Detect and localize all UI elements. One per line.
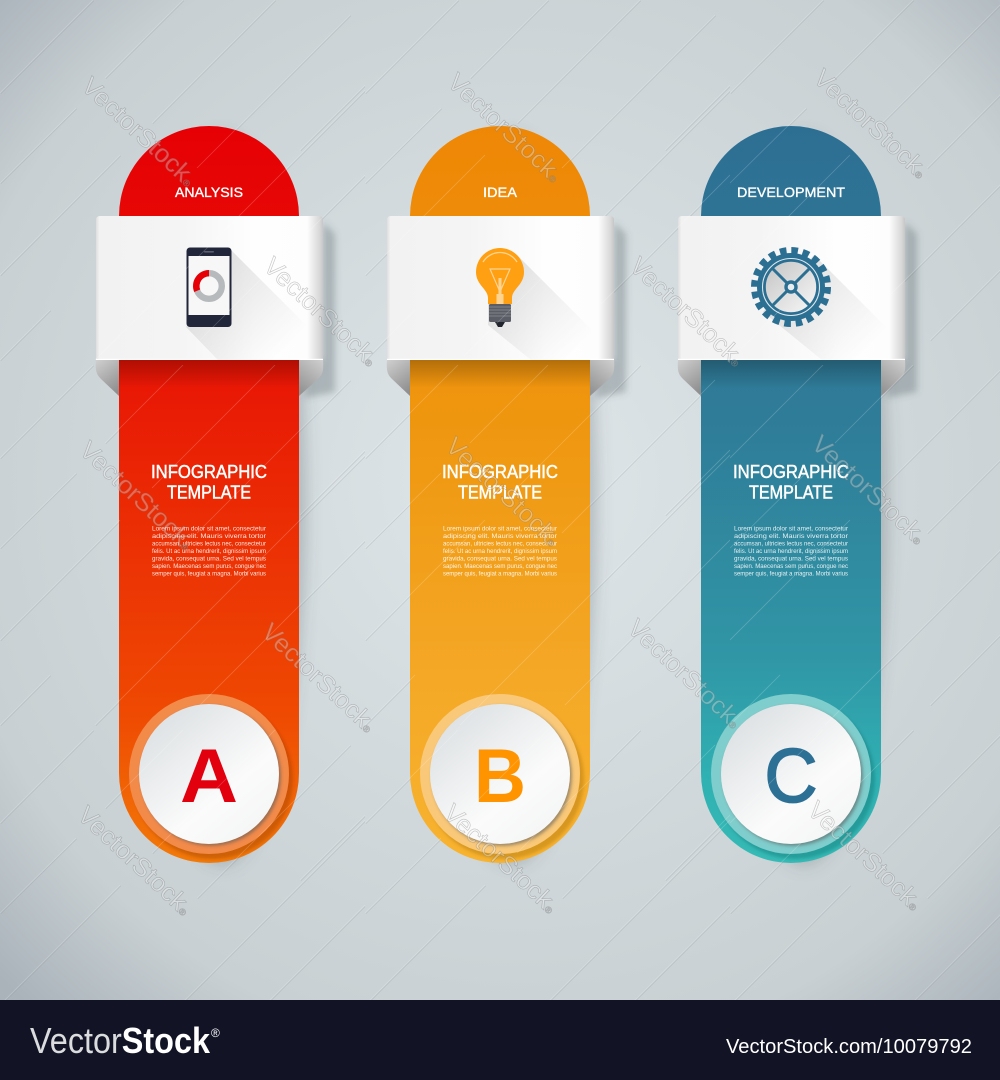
watermarks: VectorStock® — [438, 799, 564, 919]
body text: Lorem ipsum dolor sit amet, consectetur — [734, 526, 848, 532]
body text: Lorem ipsum dolor sit amet, consectetur — [443, 526, 557, 532]
badge: letter B — [420, 694, 584, 859]
body text: Lorem ipsum dolor sit amet, consectetur — [152, 526, 266, 532]
watermarks: VectorStock® — [74, 436, 200, 556]
watermarks: VectorStock® — [256, 618, 382, 738]
heading: infographic template — [733, 462, 849, 502]
badge: letter B: B — [474, 734, 526, 819]
watermarks: VectorStock® — [258, 252, 384, 372]
tab label: analysis: ANALYSIS — [175, 184, 243, 200]
watermarks: VectorStock® — [806, 430, 932, 550]
ribbon band — [387, 216, 626, 398]
watermarks: VectorStock® — [802, 796, 928, 916]
heading: infographic template: INFOGRAPHIC — [151, 462, 267, 482]
watermarks: VectorStock® — [624, 252, 750, 372]
registered mark: ® — [211, 1026, 220, 1040]
body text: semper quis, feugiat a magna. Morbi varius — [443, 572, 557, 578]
ribbon band — [678, 216, 917, 398]
heading: infographic template — [442, 462, 558, 502]
body text: sapien. Maecenas sem purus, congue nec — [734, 564, 848, 570]
watermarks: VectorStock® — [440, 432, 566, 552]
icon: light bulb — [476, 248, 614, 360]
strip: red — [119, 126, 299, 863]
body text: gravida, consequat urna. Sed vel tempus — [443, 556, 557, 562]
body text: sapien. Maecenas sem purus, congue nec — [152, 564, 266, 570]
body text: adipiscing elit. Mauris viverra tortor — [443, 534, 557, 540]
icon: gear — [754, 250, 905, 360]
heading: infographic template: TEMPLATE — [167, 482, 251, 502]
heading: infographic template — [151, 462, 267, 502]
ribbon band — [96, 216, 335, 398]
watermarks — [72, 64, 934, 921]
heading: infographic template: INFOGRAPHIC — [442, 462, 558, 482]
body text: felis. Ut ac urna hendrerit, dignissim ipsum — [734, 549, 848, 555]
badge: letter C: C — [764, 734, 818, 819]
heading: infographic template: TEMPLATE — [458, 482, 542, 502]
heading: infographic template: TEMPLATE — [749, 482, 833, 502]
strip: orange — [410, 126, 590, 863]
strip: blue — [701, 126, 881, 863]
body text: gravida, consequat urna. Sed vel tempus — [152, 556, 266, 562]
column B: idea — [387, 126, 626, 865]
watermarks: VectorStock® — [442, 68, 568, 188]
body text: accumsan, ultricies lectus nec, consectetur — [734, 542, 848, 548]
tab label: idea: IDEA — [483, 184, 518, 200]
body text: adipiscing elit. Mauris viverra tortor — [152, 534, 266, 540]
body text: felis. Ut ac urna hendrerit, dignissim ipsum — [443, 549, 557, 555]
watermarks: VectorStock® — [622, 614, 748, 734]
badge: letter A: A — [180, 734, 238, 819]
body text: semper quis, feugiat a magna. Morbi varius — [152, 572, 266, 578]
watermarks: VectorStock® — [72, 801, 198, 921]
body text: felis. Ut ac urna hendrerit, dignissim ipsum — [152, 549, 266, 555]
body text: sapien. Maecenas sem purus, congue nec — [443, 564, 557, 570]
body text: semper quis, feugiat a magna. Morbi varius — [734, 572, 848, 578]
watermarks: VectorStock® — [76, 72, 202, 192]
body text: adipiscing elit. Mauris viverra tortor — [734, 534, 848, 540]
body text — [443, 526, 557, 578]
badge: letter A — [129, 694, 293, 859]
body text: accumsan, ultricies lectus nec, consectetur — [443, 542, 557, 548]
icon: phone with donut chart — [186, 248, 323, 360]
column A: analysis — [96, 126, 335, 865]
body text — [152, 526, 266, 578]
heading: infographic template: INFOGRAPHIC — [733, 462, 849, 482]
footer bar — [0, 1000, 1000, 1080]
body text: gravida, consequat urna. Sed vel tempus — [734, 556, 848, 562]
footer image id: VectorStock.com/10079792 — [726, 1036, 972, 1058]
watermarks: VectorStock® — [808, 64, 934, 184]
body text: accumsan, ultricies lectus nec, consectetur — [152, 542, 266, 548]
body text — [734, 526, 848, 578]
footer logo: VectorStock — [30, 1020, 211, 1061]
tab label: development: DEVELOPMENT — [737, 184, 845, 200]
badge: letter C — [711, 694, 875, 859]
column C: development — [678, 126, 917, 865]
